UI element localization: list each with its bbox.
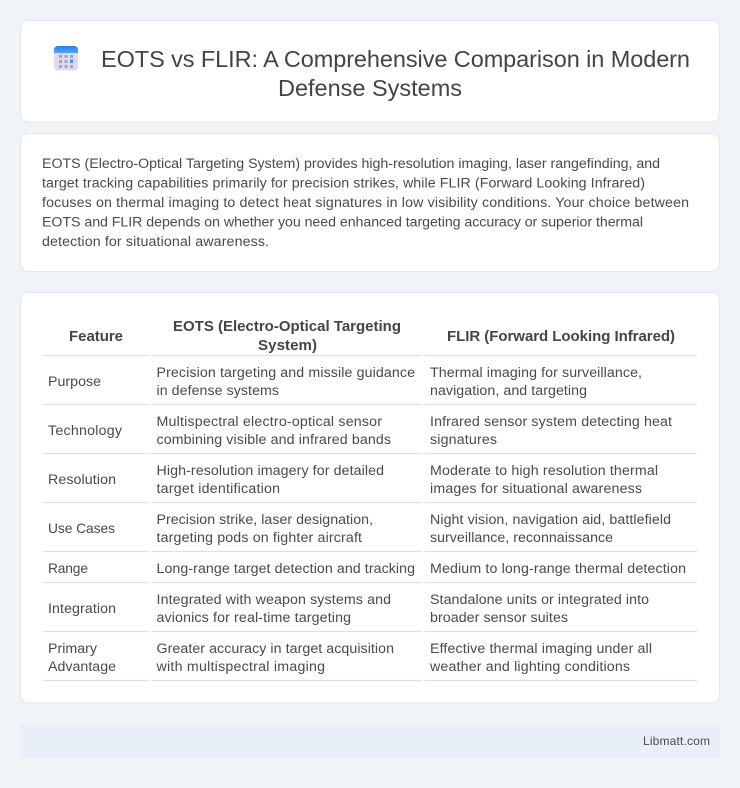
- row: technology: combining visible and infrared bands: [156, 432, 391, 448]
- title: Defense Systems: [278, 75, 462, 101]
- row: integration: broader sensor suites: [430, 610, 568, 626]
- table header: FLIR (Forward Looking Infrared): [447, 328, 675, 345]
- row: resolution: Moderate to high resolution thermal: [430, 463, 658, 479]
- row: purpose: in defense systems: [156, 383, 279, 399]
- row: primary advantage: weather and lighting conditions: [429, 659, 630, 675]
- table header: EOTS (Electro-Optical Targeting: [173, 318, 401, 335]
- row: resolution: High-resolution imagery for detailed: [156, 463, 384, 479]
- text block: introduction: EOTS and FLIR depends on whether you need enhanced targeting accuracy or superior thermal: [42, 214, 643, 230]
- row: integration: [48, 592, 649, 626]
- row: purpose: [48, 365, 642, 399]
- footer: Libmatt.com: [643, 734, 710, 748]
- panel: introduction: [20, 134, 720, 272]
- panel: comparison table: [20, 292, 720, 703]
- row: technology: Technology: [48, 423, 123, 439]
- text block: introduction: target tracking capabilities primarily for precision strikes, while FLIR (Forward Looking Infrared): [42, 176, 645, 192]
- row: resolution: [48, 463, 658, 497]
- row: use cases: targeting pods on fighter aircraft: [156, 530, 362, 546]
- text block: introduction: detection for situational awareness.: [42, 234, 269, 250]
- row: use cases: [48, 512, 671, 546]
- row: range: [48, 561, 686, 577]
- table header: System): [258, 337, 317, 354]
- row: integration: Integration: [48, 601, 116, 617]
- row: range: Medium to long-range thermal detection: [430, 561, 686, 577]
- row: purpose: Thermal imaging for surveillance,: [430, 365, 642, 381]
- text block: introduction: EOTS (Electro-Optical Targeting System) provides high-resolution imaging, laser rangefinding, and: [42, 156, 660, 172]
- row: purpose: Precision targeting and missile guidance: [156, 365, 415, 381]
- icon: calendar: [54, 46, 78, 70]
- row: primary advantage: with multispectral imaging: [156, 659, 325, 675]
- row: resolution: images for situational awareness: [430, 481, 642, 497]
- row: resolution: Resolution: [48, 472, 116, 488]
- row: technology: [48, 414, 672, 448]
- panel: title header: [20, 20, 720, 122]
- row: primary advantage: Advantage: [48, 659, 116, 675]
- row: purpose: navigation, and targeting: [430, 383, 587, 399]
- title: EOTS vs FLIR: A Comprehensive Comparison in Modern: [101, 46, 690, 72]
- row: integration: Integrated with weapon systems and: [156, 592, 391, 608]
- row: technology: Multispectral electro-optical sensor: [156, 414, 382, 430]
- row: primary advantage: Primary: [48, 641, 98, 657]
- row: primary advantage: Greater accuracy in target acquisition: [156, 641, 394, 657]
- row: use cases: Precision strike, laser designation,: [156, 512, 373, 528]
- row: use cases: surveillance, reconnaissance: [430, 530, 613, 546]
- text block: introduction: focuses on thermal imaging to detect heat signatures in low visibility conditions. Your choice between: [42, 195, 689, 211]
- row: resolution: target identification: [156, 481, 280, 497]
- title: [101, 46, 690, 101]
- row: range: Range: [48, 561, 88, 576]
- row: use cases: Use Cases: [48, 521, 115, 536]
- row: primary advantage: [48, 641, 652, 675]
- row: integration: avionics for real-time targeting: [156, 610, 351, 626]
- table header: [69, 318, 675, 354]
- text block: introduction: [42, 156, 689, 250]
- row: use cases: Night vision, navigation aid, battlefield: [430, 512, 671, 528]
- row: purpose: Purpose: [48, 374, 101, 390]
- footer: [20, 724, 720, 758]
- row: primary advantage: Effective thermal imaging under all: [430, 641, 652, 657]
- table header: Feature: [69, 328, 123, 345]
- row: technology: signatures: [430, 432, 497, 448]
- row: range: Long-range target detection and tracking: [156, 561, 415, 577]
- row: integration: Standalone units or integrated into: [430, 592, 649, 608]
- row: technology: Infrared sensor system detecting heat: [430, 414, 672, 430]
